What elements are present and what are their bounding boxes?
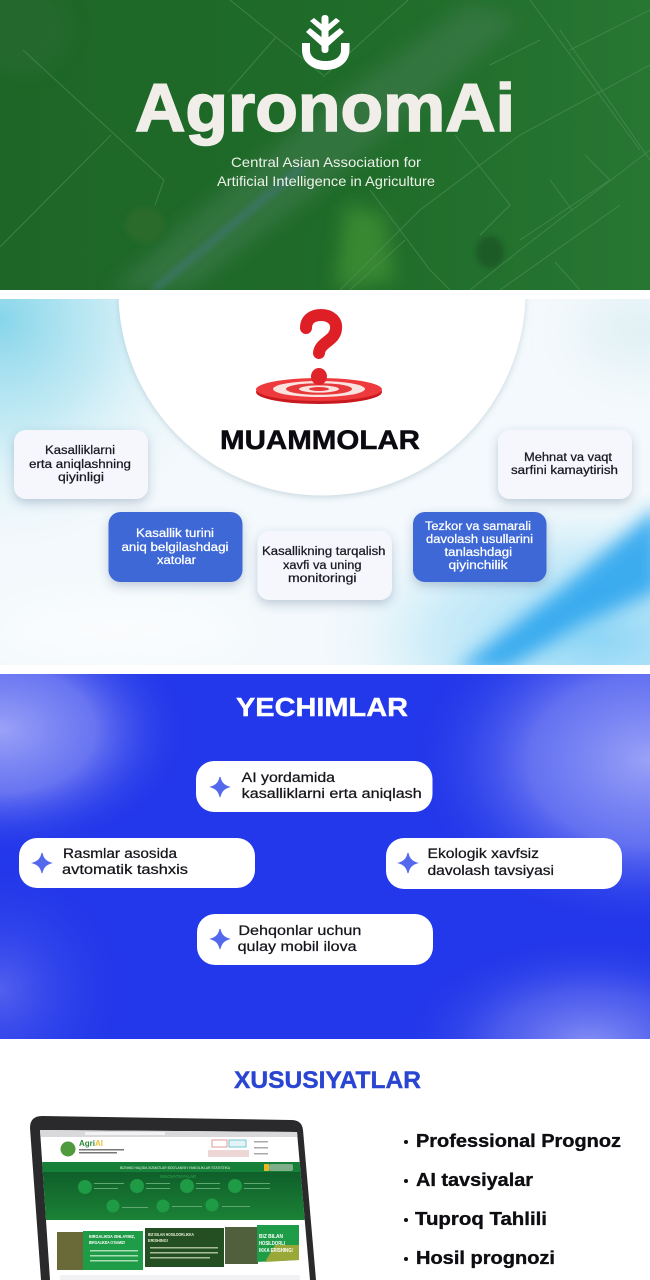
pill: automatic diagnosis <box>19 838 255 888</box>
panel: white half circle <box>117 299 528 500</box>
illustration: laptop with website: HOSILDORLI <box>259 1241 285 1247</box>
pill: mobile app <box>197 914 433 965</box>
panel: yechimlar background <box>0 674 650 1039</box>
panel: muammolar background <box>0 290 650 670</box>
text block: subtitle: Central Asian Association for <box>231 154 421 170</box>
card: spread risk monitoring: xavfi va uning <box>283 560 362 572</box>
card: treatment choice difficulty: davolash usullarini <box>426 534 533 546</box>
pill: mobile app: Dehqonlar uchun <box>238 923 361 938</box>
list: features: Professional Prognoz <box>416 1131 621 1151</box>
card: treatment choice difficulty: Tezkor va samarali <box>425 521 531 533</box>
pill: automatic diagnosis: avtomatik tashxis <box>62 862 188 877</box>
heading: YECHIMLAR: YECHIMLAR <box>236 692 408 722</box>
card: treatment choice difficulty: qiyinchilik <box>448 560 508 572</box>
illustration: laptop with website <box>30 1116 316 1280</box>
card: early detection difficulty <box>14 430 148 499</box>
list: features <box>404 1131 621 1268</box>
card: labour and time <box>498 430 632 499</box>
illustration: laptop with website: BIRGALIKDA O'SAMIZ! <box>89 1240 125 1245</box>
illustration: laptop with website: AgriAI <box>79 1139 103 1148</box>
card: labour and time: sarfini kamaytirish <box>511 465 618 477</box>
panel: hero aerial field background <box>0 0 650 290</box>
pill: early detection with AI: kasalliklarni erta aniqlash <box>242 786 422 801</box>
card: spread risk monitoring <box>258 531 392 600</box>
illustration: laptop with website: BIZNING HAQIDA XIZMATLAR BOG'LANISH YANGILIKLAR STATISTIKA <box>120 1165 230 1170</box>
list: features: Tuproq Tahlili <box>415 1209 547 1229</box>
heading: XUSUSIYATLAR: XUSUSIYATLAR <box>234 1067 421 1094</box>
card: spread risk monitoring: Kasallikning tarqalish <box>262 546 386 558</box>
icon: red question mark on target <box>256 315 382 404</box>
illustration: laptop with website: BIZ BILAN <box>259 1234 283 1240</box>
pill: early detection with AI <box>196 761 432 812</box>
card: early detection difficulty: Kasalliklarni <box>45 445 115 457</box>
card: labour and time: Mehnat va vaqt <box>524 452 613 464</box>
card: disease type errors: xatolar <box>157 555 196 567</box>
pill: ecological treatment <box>386 838 622 889</box>
title: AgronomAi: AgronomAi <box>135 70 515 146</box>
card: early detection difficulty: qiyinligi <box>58 472 104 484</box>
illustration: laptop with website: ERISHING! <box>148 1238 168 1243</box>
illustration: laptop with website: INNOVATSIYALAR <box>160 1174 197 1179</box>
pill: ecological treatment: Ekologik xavfsiz <box>428 846 539 861</box>
card: spread risk monitoring: monitoringi <box>288 573 356 585</box>
illustration: laptop with website: IKKA ERISHING! <box>259 1248 293 1254</box>
card: treatment choice difficulty: tanlashdagi <box>444 547 512 559</box>
pill: early detection with AI: AI yordamida <box>242 770 336 785</box>
list: features: Hosil prognozi <box>416 1248 555 1268</box>
text block: subtitle <box>217 154 435 189</box>
illustration: laptop with website: BIRGALIKDA ISHLAYMIZ, <box>89 1234 135 1239</box>
pill: mobile app: qulay mobil ilova <box>238 939 357 954</box>
text block: subtitle: Artificial Intelligence in Agriculture <box>217 173 435 189</box>
card: disease type errors <box>108 512 242 582</box>
card: treatment choice difficulty <box>413 512 546 582</box>
icon: sprout logo <box>302 15 350 70</box>
heading: MUAMMOLAR: MUAMMOLAR <box>220 425 420 455</box>
card: early detection difficulty: erta aniqlashning <box>29 459 131 471</box>
pill: ecological treatment: davolash tavsiyasi <box>428 863 554 878</box>
pill: automatic diagnosis: Rasmlar asosida <box>63 846 178 861</box>
list: features: AI tavsiyalar <box>416 1170 533 1190</box>
illustration: laptop with website: BIZ BILAN HOSILDORLIKKA <box>148 1232 195 1237</box>
card: disease type errors: aniq belgilashdagi <box>122 542 228 554</box>
card: disease type errors: Kasallik turini <box>136 528 214 540</box>
